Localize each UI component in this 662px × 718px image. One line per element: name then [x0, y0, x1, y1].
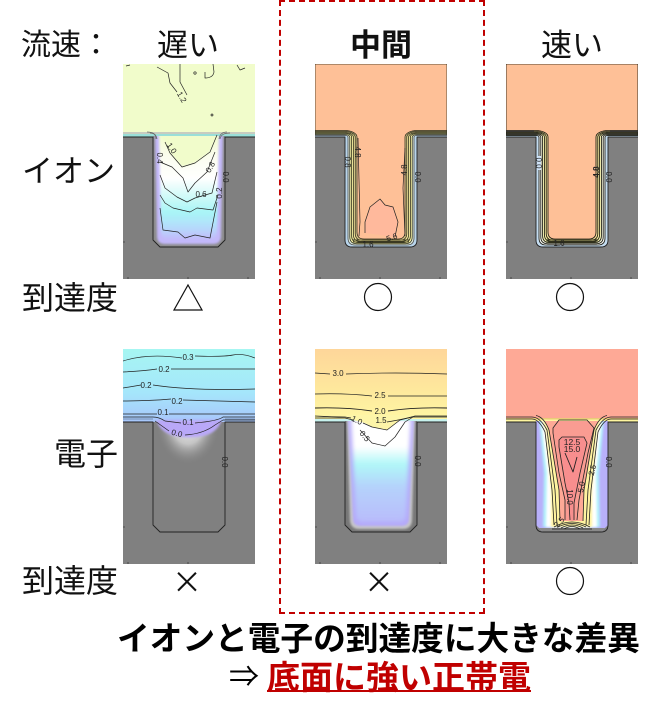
- conclusion result: ⇒: [229, 661, 259, 694]
- conclusion result: 底面に強い正帯電: [267, 659, 531, 696]
- mark: cross medium electrons: ×: [364, 558, 394, 602]
- chart: electrons slow: 0.0: [170, 428, 184, 439]
- chart: electrons medium: 2.0: [374, 407, 386, 416]
- chart: electrons fast: [506, 349, 638, 564]
- chart: electrons slow: 0.3: [182, 353, 194, 362]
- row label: electron reach: 到達度: [22, 563, 118, 599]
- dashed highlight box: medium flow: [279, 0, 485, 614]
- chart: ions slow: 0.0: [221, 171, 230, 183]
- chart: ions medium: 4.8: [400, 164, 409, 176]
- chart: ions slow: 0.6: [195, 190, 207, 199]
- chart: ions fast: [506, 64, 638, 279]
- chart: ions slow: 0.8: [204, 160, 217, 174]
- chart: ions medium: 1.6: [362, 240, 374, 249]
- chart: electrons slow: 0.2: [171, 397, 183, 406]
- chart: electrons fast: 0.0: [604, 456, 613, 468]
- label: flow speed: 流速：: [21, 29, 111, 62]
- chart: electrons fast: 10.0: [565, 489, 574, 505]
- chart: ions slow: 1.0: [165, 141, 179, 156]
- heading: medium: 中間: [350, 28, 412, 63]
- chart: ions fast: 0.0: [534, 157, 543, 169]
- chart: electrons medium: 3.0: [332, 369, 344, 378]
- chart: ions slow: [123, 64, 255, 279]
- mark: circle fast ions: [556, 282, 584, 312]
- chart: electrons medium: 2.5: [374, 391, 386, 400]
- heading: fast: 速い: [541, 28, 603, 63]
- chart: electrons fast: 5.0: [576, 480, 587, 493]
- chart: electrons medium: 0.5: [358, 429, 372, 444]
- chart: electrons medium: 1.0: [350, 414, 364, 427]
- conclusion line: イオンと電子の到達度に大きな差異: [117, 620, 640, 657]
- chart: electrons fast: 12.5: [564, 437, 581, 447]
- mark: circle fast electrons: [556, 566, 584, 596]
- chart: ions slow: 1.2: [175, 90, 189, 105]
- chart: ions medium: 0.8: [343, 156, 352, 168]
- chart: electrons slow: 0.2: [158, 365, 170, 374]
- chart: electrons fast: 15.0: [564, 444, 581, 454]
- chart: ions fast: 0.0: [604, 171, 613, 183]
- chart: electrons slow: 0.1: [182, 418, 194, 427]
- chart: electrons medium: [315, 349, 447, 564]
- chart: ions medium: 5.6: [385, 231, 399, 244]
- chart: ions medium: 0.0: [413, 171, 422, 183]
- chart: electrons fast: 2.5: [552, 515, 567, 529]
- heading: slow: 遅い: [157, 28, 219, 63]
- chart: electrons slow: 0.1: [157, 408, 169, 417]
- chart: ions medium: [315, 64, 447, 279]
- chart: electrons slow: [123, 349, 255, 564]
- chart: ions fast: 1.6: [553, 239, 565, 248]
- chart: ions slow: 0.4: [155, 152, 164, 164]
- chart: electrons slow: 0.2: [140, 381, 152, 390]
- chart: ions fast: 4.8: [592, 166, 601, 178]
- chart: electrons medium: 1.5: [375, 416, 387, 425]
- chart: ions slow: 0.2: [215, 187, 224, 199]
- mark: cross slow electrons: ×: [172, 558, 202, 602]
- chart: ions medium: 4.8: [353, 146, 362, 158]
- chart: electrons fast: 2.5: [587, 463, 598, 477]
- mark: triangle: [173, 284, 203, 311]
- mark: circle medium ions: [364, 282, 392, 312]
- chart: electrons medium: 0.0: [413, 455, 422, 467]
- chart: electrons slow: 0.0: [220, 456, 229, 468]
- row label: ions: イオン: [22, 154, 115, 189]
- row label: electrons: 電子: [54, 436, 118, 472]
- row label: ion reach: 到達度: [22, 280, 118, 316]
